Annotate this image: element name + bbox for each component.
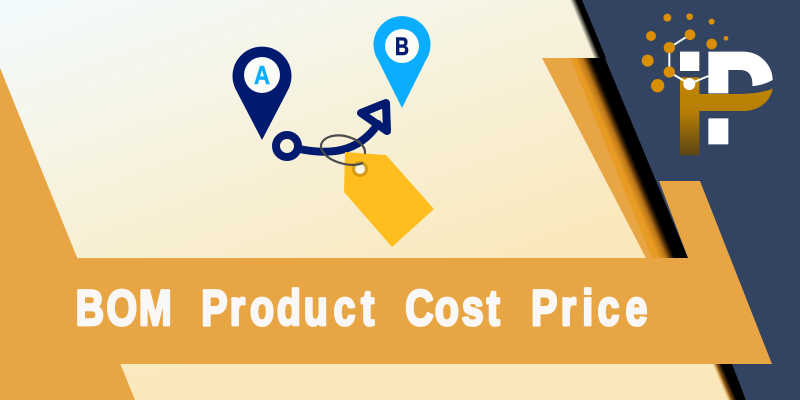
- logo: network dots: [642, 13, 728, 92]
- shadow stripe: lower: [711, 364, 746, 400]
- icon: route arrow: [276, 103, 387, 157]
- logo: network lines: [669, 35, 708, 84]
- logo: white letter blocks: [680, 52, 773, 144]
- orange title banner: [0, 181, 772, 364]
- orange fold: light triangle: [542, 58, 652, 258]
- orange fold with dark shadow: [570, 58, 688, 258]
- title: [76, 279, 647, 336]
- title: Cost: [405, 279, 500, 336]
- icon: map pin A: [232, 47, 292, 140]
- left orange wedge: [0, 68, 135, 400]
- logo: [642, 13, 773, 155]
- navy right panel: [581, 0, 800, 400]
- icon: map pin A: A: [254, 60, 270, 90]
- shadow stripe: upper: [569, 0, 606, 58]
- title: Product: [201, 279, 374, 336]
- icon: map pin B: [374, 16, 430, 108]
- logo: gold letter: [680, 77, 773, 155]
- title: BOM: [76, 279, 172, 336]
- icon: price tag: [321, 135, 434, 247]
- icon: map pin B: B: [395, 33, 409, 61]
- title: Price: [531, 279, 647, 336]
